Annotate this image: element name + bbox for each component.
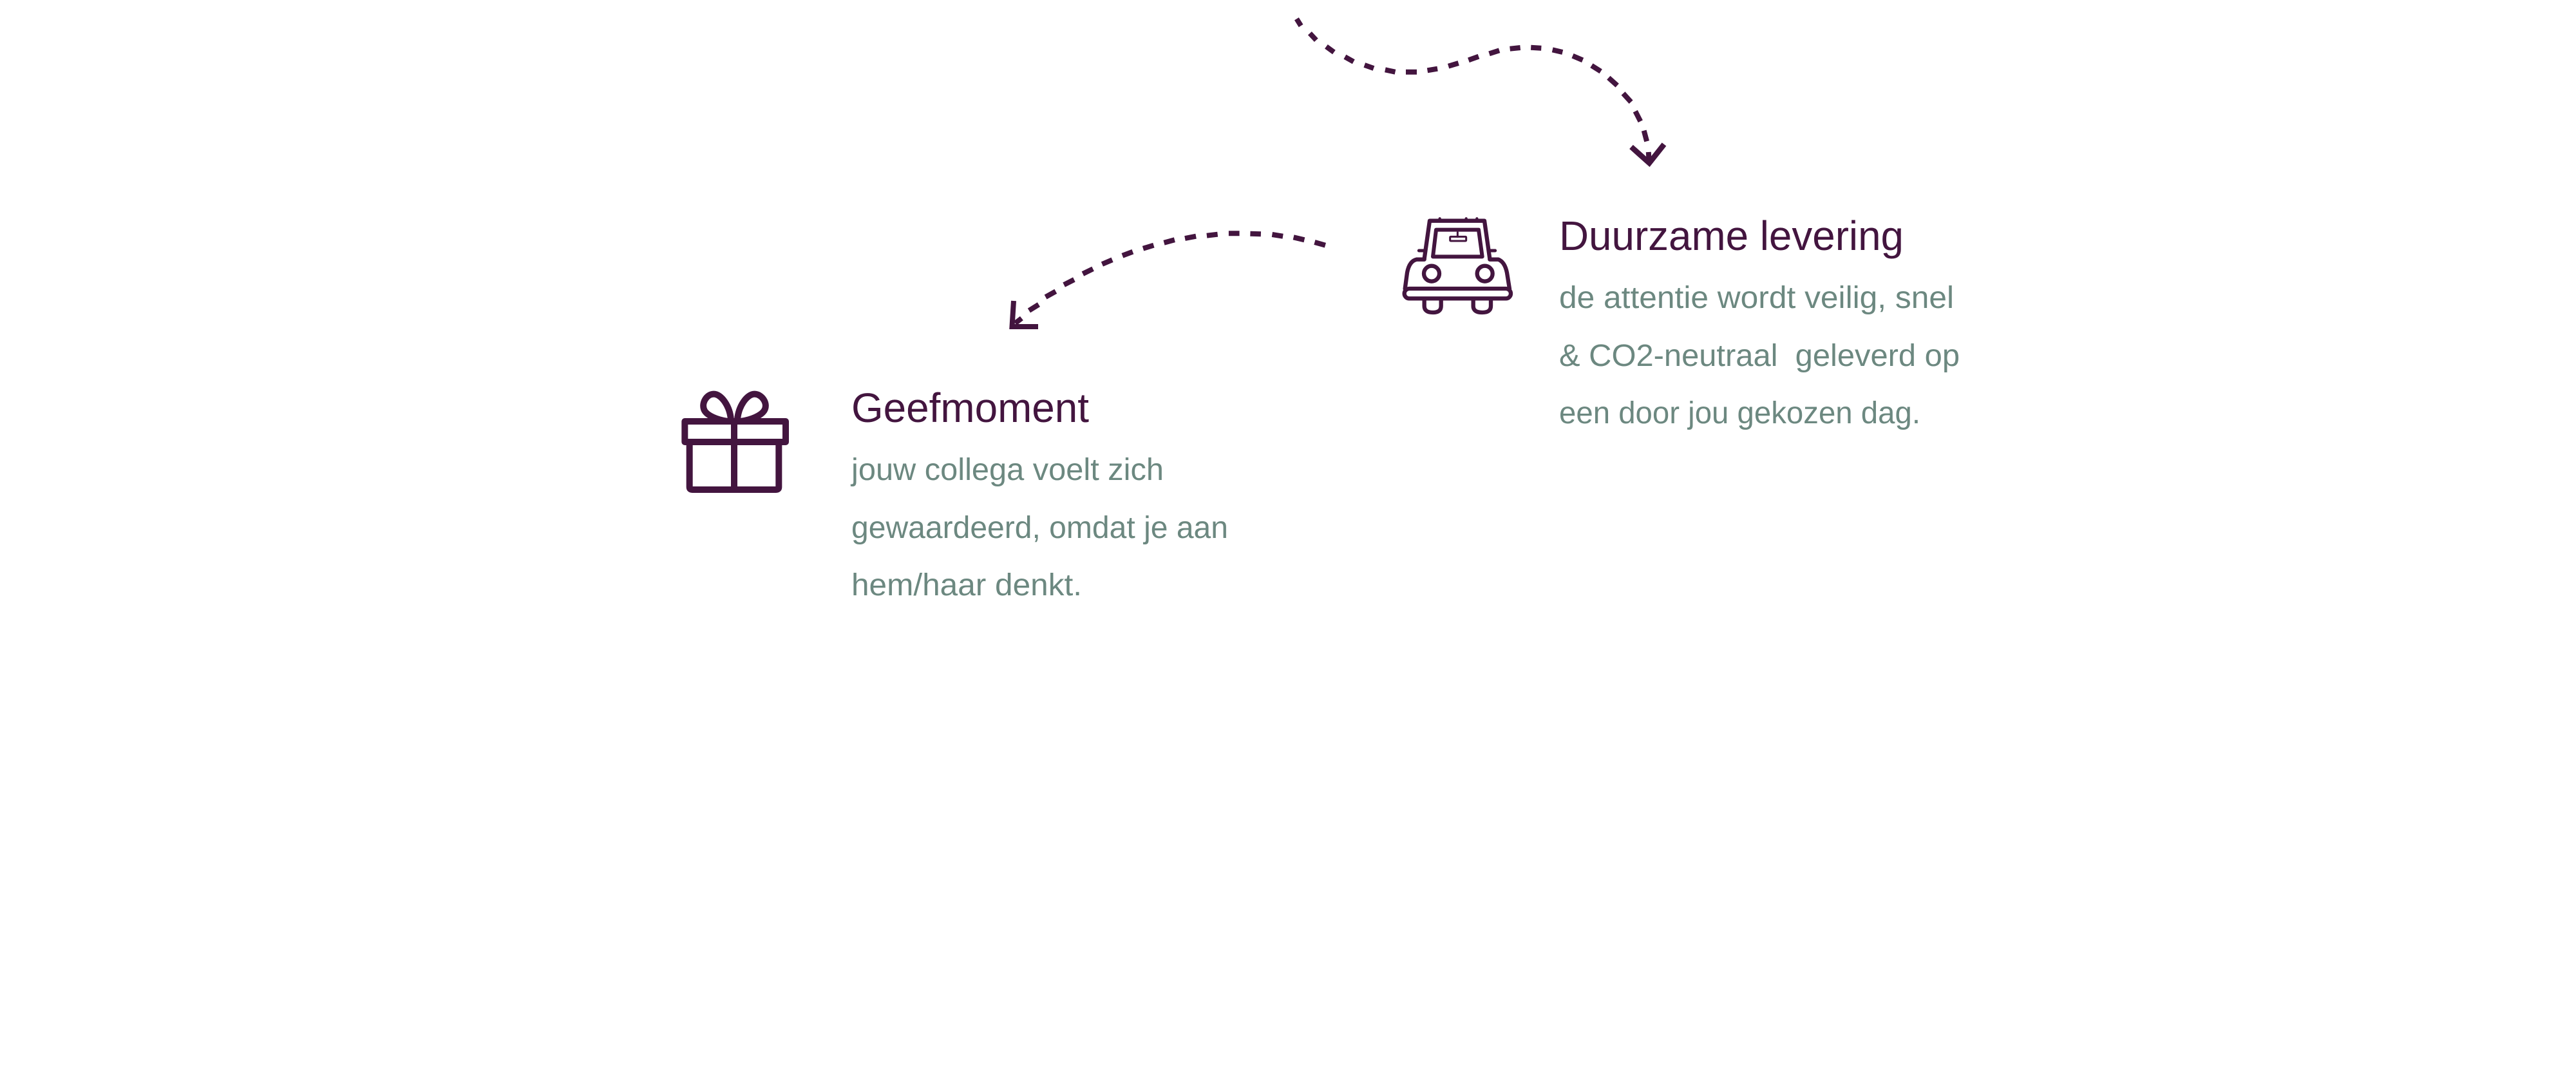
- text block: delivery description: [1559, 281, 1960, 430]
- icon: gift box: [685, 394, 786, 490]
- text block: delivery description: een door jou gekozen dag.: [1559, 396, 1920, 430]
- panel: sustainable delivery: [1405, 213, 1960, 430]
- text block: gift moment description: jouw collega voelt zich: [850, 453, 1164, 487]
- heading: Geefmoment: Geefmoment: [851, 385, 1089, 431]
- text block: gift moment description: [850, 453, 1228, 602]
- text block: delivery description: & CO2-neutraal geleverd op: [1559, 339, 1960, 373]
- arrow: wavy dashed arrow down to delivery: [1296, 19, 1664, 163]
- text block: delivery description: de attentie wordt veilig, snel: [1559, 281, 1954, 315]
- text block: gift moment description: hem/haar denkt.: [851, 568, 1082, 602]
- heading: Duurzame levering: Duurzame levering: [1559, 213, 1904, 259]
- panel: gift moment: [685, 385, 1228, 602]
- arrow: curved dashed arrow down-left to gift moment: [1012, 233, 1325, 327]
- text block: gift moment description: gewaardeerd, omdat je aan: [851, 511, 1228, 545]
- icon: car: [1405, 218, 1511, 312]
